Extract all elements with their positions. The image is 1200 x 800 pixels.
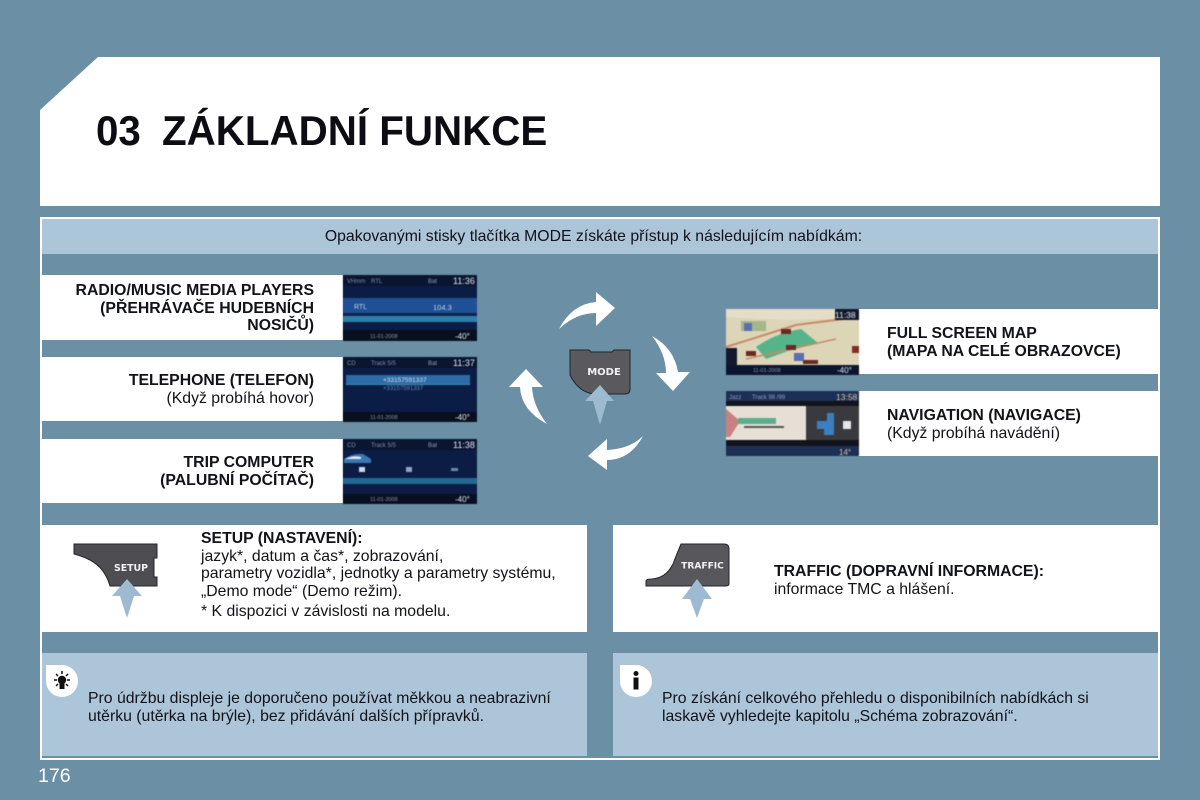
text: telephone <box>129 372 314 407</box>
arrow: left <box>509 369 547 424</box>
screen: telephone: CD <box>347 361 356 367</box>
icon: SETUP button: SETUP <box>114 563 148 574</box>
panel: maintenance note <box>42 653 587 756</box>
screen: telephone: +33157591337 <box>383 377 427 384</box>
row: navigation <box>858 391 1158 456</box>
text: full screen map <box>887 325 1121 360</box>
header panel <box>40 57 1160 206</box>
panel: traffic <box>613 525 1158 632</box>
screen: radio: VHmm <box>347 279 365 285</box>
text: navigation <box>887 407 1081 442</box>
text: telephone: (Když probíhá hovor) <box>166 390 314 407</box>
panel: setup <box>42 525 587 632</box>
text: setup: SETUP (NASTAVENÍ): <box>201 530 362 547</box>
main frame <box>40 217 1160 760</box>
screen: telephone: Bat <box>428 361 437 367</box>
row: telephone <box>42 357 343 421</box>
screen: telephone: 11-01-2008 <box>370 415 398 421</box>
screen: trip computer: Track 5/5 <box>371 443 396 449</box>
screen: map <box>725 308 860 376</box>
screen: map: -40° <box>837 366 852 375</box>
text: maintenance note <box>88 690 551 725</box>
screen: trip computer: CD <box>347 443 356 449</box>
screen: trip computer: 11:38 <box>453 440 475 450</box>
text: navigation: NAVIGATION (NAVIGACE) <box>887 407 1081 424</box>
icon: cycle arrows <box>509 292 690 470</box>
icon: info <box>620 665 652 697</box>
screen: trip computer <box>342 438 478 505</box>
screen: trip computer: -40° <box>455 495 470 504</box>
text: maintenance note: Pro údržbu displeje je doporučeno používat měkkou a neabrazivní <box>88 690 551 707</box>
title: 03 ZÁKLADNÍ FUNKCE <box>96 107 547 154</box>
text: setup footnote: * K dispozici v závislosti na modelu. <box>201 603 450 620</box>
text: full screen map: (MAPA NA CELÉ OBRAZOVCE) <box>887 343 1121 360</box>
text: trip computer <box>160 454 314 489</box>
row: radio <box>42 275 343 340</box>
intro banner: Opakovanými stisky tlačítka MODE získáte přístup k následujícím nabídkám: <box>325 228 862 245</box>
text: setup: parametry vozidla*, jednotky a parametry systému, <box>201 565 556 582</box>
screen: navigation <box>725 390 860 457</box>
arrow: MODE press <box>585 385 614 425</box>
text: setup: „Demo mode“ (Demo režim). <box>201 583 402 600</box>
screen: navigation: 14° <box>839 448 851 457</box>
screen: telephone: +33157591337 <box>383 386 424 392</box>
screen: radio: 11-01-2008 <box>370 334 398 340</box>
text: info note <box>662 690 1089 725</box>
screen: radio: RTL <box>354 304 367 311</box>
text: traffic <box>774 562 1044 598</box>
screen: radio: 104.3 <box>433 303 452 312</box>
page number: 176 <box>38 765 71 787</box>
icon: TRAFFIC button: TRAFFIC <box>681 562 724 572</box>
screen: telephone <box>342 356 478 423</box>
icon: TRAFFIC button <box>646 544 730 618</box>
panel: info note <box>613 653 1158 756</box>
screen: radio: -40° <box>455 332 470 341</box>
text: traffic: informace TMC a hlášení. <box>774 581 955 598</box>
text: info note: Pro získání celkového přehledu o disponibilních nabídkách si <box>662 690 1089 707</box>
screen: telephone: 11:37 <box>453 358 475 368</box>
button: MODE: MODE <box>587 367 621 378</box>
text: trip computer: TRIP COMPUTER <box>184 454 314 471</box>
text: radio: NOSIČŮ) <box>247 317 314 334</box>
text: setup <box>200 529 556 600</box>
screen: navigation: 13:58 <box>836 392 858 402</box>
screen: telephone: -40° <box>455 413 470 422</box>
screen: radio: RTL <box>371 279 383 285</box>
text: radio: (PŘEHRÁVAČE HUDEBNÍCH <box>100 300 314 317</box>
intro banner <box>42 219 1158 254</box>
text: full screen map: FULL SCREEN MAP <box>887 325 1037 342</box>
text: setup: jazyk*, datum a čas*, zobrazování, <box>201 548 443 565</box>
row: full screen map <box>858 309 1158 374</box>
icon: SETUP button <box>74 544 158 618</box>
screen: radio: Bat <box>428 279 437 285</box>
text: traffic: TRAFFIC (DOPRAVNÍ INFORMACE): <box>774 563 1044 580</box>
screen: map: 11-01-2008 <box>753 368 781 374</box>
text: maintenance note: utěrku (utěrka na brýle), bez přidávání dalších přípravků. <box>88 708 484 725</box>
screen: radio <box>342 274 478 342</box>
arrow: bottom <box>588 436 643 470</box>
icon: light bulb <box>46 665 78 697</box>
text: trip computer: (PALUBNÍ POČÍTAČ) <box>160 472 314 489</box>
screen: navigation: Track 98 /99 <box>752 395 786 401</box>
text: navigation: (Když probíhá navádění) <box>887 425 1060 442</box>
arrow: right <box>652 336 690 391</box>
text: radio: RADIO/MUSIC MEDIA PLAYERS <box>76 282 314 299</box>
text: telephone: TELEPHONE (TELEFON) <box>129 372 314 389</box>
text: info note: laskavě vyhledejte kapitolu „Schéma zobrazování“. <box>662 708 1018 725</box>
screen: map: 11:38 <box>835 310 856 320</box>
screen: navigation: Jazz <box>729 395 741 401</box>
screen: radio: 11:36 <box>453 276 475 286</box>
arrow: top <box>559 292 615 329</box>
screen: trip computer: 11-01-2008 <box>370 497 398 503</box>
screen: telephone: Track 5/5 <box>371 361 396 367</box>
text: radio <box>76 282 314 334</box>
screen: trip computer: Bat <box>428 443 437 449</box>
row: trip computer <box>42 439 343 503</box>
button: MODE <box>570 350 630 394</box>
